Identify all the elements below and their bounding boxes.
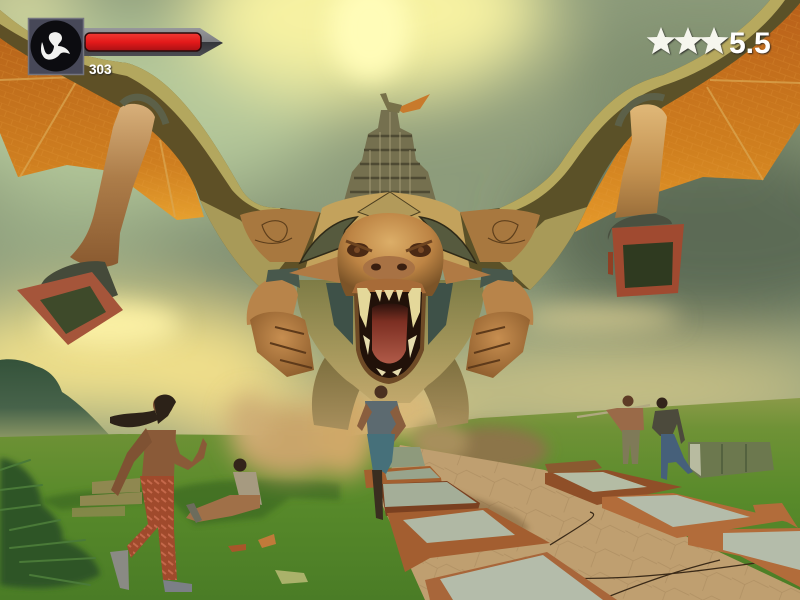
score value: 303 [89, 62, 112, 77]
left arm and fist [247, 268, 314, 377]
legs [312, 345, 469, 430]
right villager walking [652, 398, 693, 480]
star 1 [647, 27, 675, 54]
right wing arm [450, 0, 800, 290]
crate [688, 442, 774, 478]
mud path [380, 445, 800, 600]
rating [647, 27, 771, 60]
right wing membrane [575, 3, 800, 232]
temple [344, 110, 436, 201]
chest panels [326, 283, 453, 345]
sky [0, 0, 800, 460]
right block [608, 224, 684, 297]
right villager with spear [577, 396, 650, 464]
health bar HUD [28, 18, 223, 77]
hill [0, 359, 114, 440]
rubble stack [72, 478, 142, 517]
left wing arm [0, 10, 330, 290]
rating value: 5.5 [729, 27, 771, 60]
right hanging leg [608, 96, 672, 240]
ground [0, 398, 800, 600]
dust cloud left [228, 382, 439, 478]
torso [255, 192, 525, 270]
horns [300, 217, 476, 263]
fern bushes [0, 458, 100, 588]
seated villager [186, 458, 262, 523]
health bar frame [84, 28, 223, 56]
grass shadow [40, 479, 340, 525]
left hanging leg [40, 97, 166, 298]
left block [17, 272, 123, 345]
debris [228, 534, 308, 584]
star 3 [700, 27, 728, 54]
belly [297, 280, 484, 403]
stone slabs [364, 447, 800, 600]
dust cloud right [412, 422, 548, 474]
mouth and fangs [354, 288, 426, 384]
head [337, 213, 443, 296]
woman with flowing hair [110, 394, 207, 592]
right arm and fist [466, 268, 533, 378]
ears [289, 256, 491, 284]
left wing membrane [0, 35, 204, 220]
star 2 [674, 27, 702, 54]
portrait icon [28, 18, 84, 74]
health bar fill [85, 33, 201, 51]
running man [357, 386, 406, 520]
small dragon on temple [380, 93, 430, 113]
